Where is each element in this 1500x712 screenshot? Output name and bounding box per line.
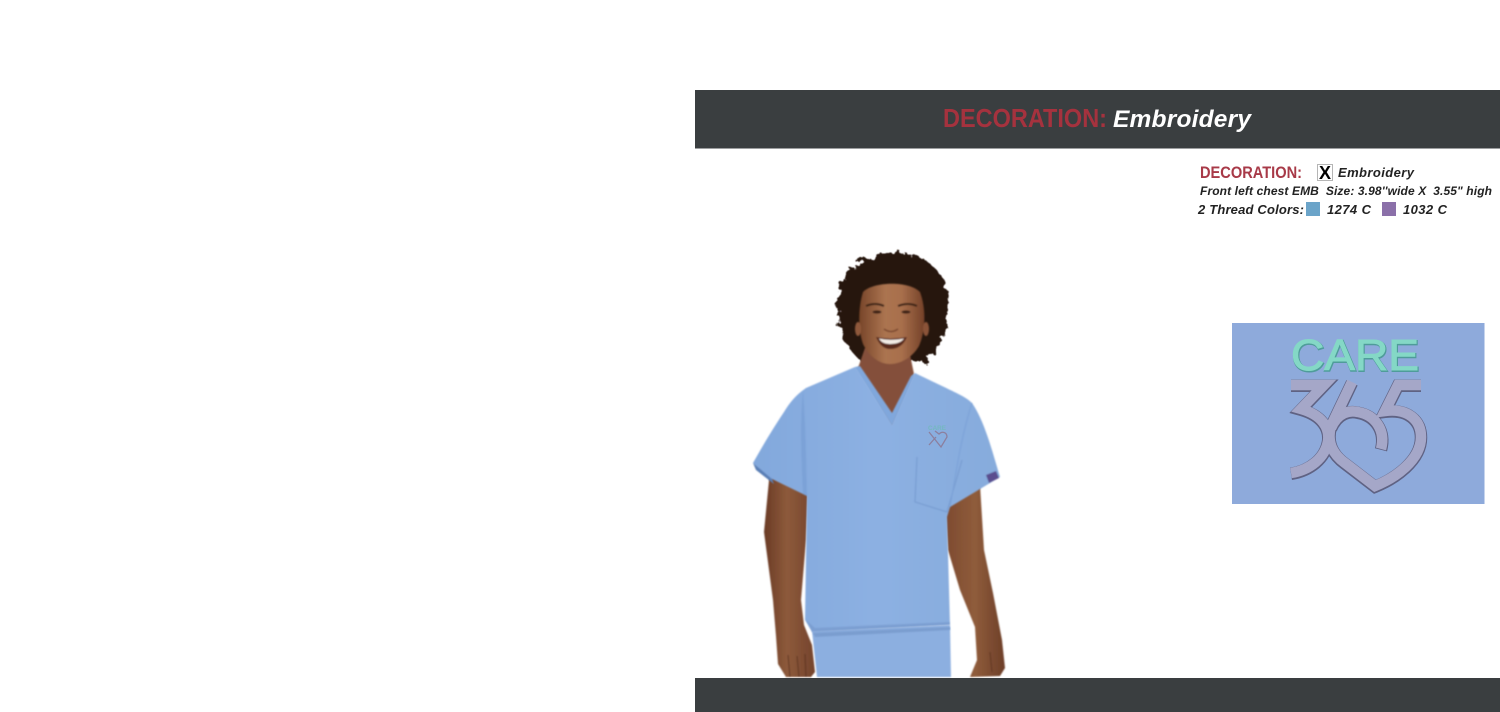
chest embroidery: CARE <box>928 426 946 432</box>
thread colours label: 2 Thread Colors: <box>1197 202 1304 217</box>
header title <box>943 105 1252 133</box>
CARE lettering: CARE <box>1291 331 1419 380</box>
thread code 1032 C: 1032 C <box>1403 202 1448 217</box>
thread code 1274 C: 1274 C <box>1327 202 1372 217</box>
chest embroidery <box>928 426 947 447</box>
decoration label: DECORATION: <box>1200 164 1302 182</box>
photo: man wearing blue scrubs <box>753 253 1005 677</box>
scrub top <box>753 366 1000 637</box>
header title: Embroidery <box>1113 106 1252 133</box>
bottom band <box>695 678 1500 712</box>
header title: DECORATION: <box>943 105 1107 133</box>
decoration details text block <box>1197 163 1492 217</box>
top header band <box>695 90 1500 148</box>
sleeve tag <box>986 471 999 483</box>
CARE lettering: CARE <box>1292 332 1420 381</box>
swatch 1274 C <box>1306 202 1320 216</box>
arms <box>764 470 1005 677</box>
placement and size: Front left chest EMB Size: 3.98''wide X 3.55" high <box>1200 184 1492 198</box>
scrub pants <box>812 625 951 677</box>
swatch 1032 C <box>1382 202 1396 216</box>
checkbox marked X: X <box>1319 163 1331 183</box>
stylised 365 heart logo mark <box>1291 382 1421 487</box>
embroidery option label: Embroidery <box>1338 165 1415 180</box>
neck and face <box>855 284 929 427</box>
hair <box>837 253 949 362</box>
embroidered logo panel <box>1232 323 1484 504</box>
